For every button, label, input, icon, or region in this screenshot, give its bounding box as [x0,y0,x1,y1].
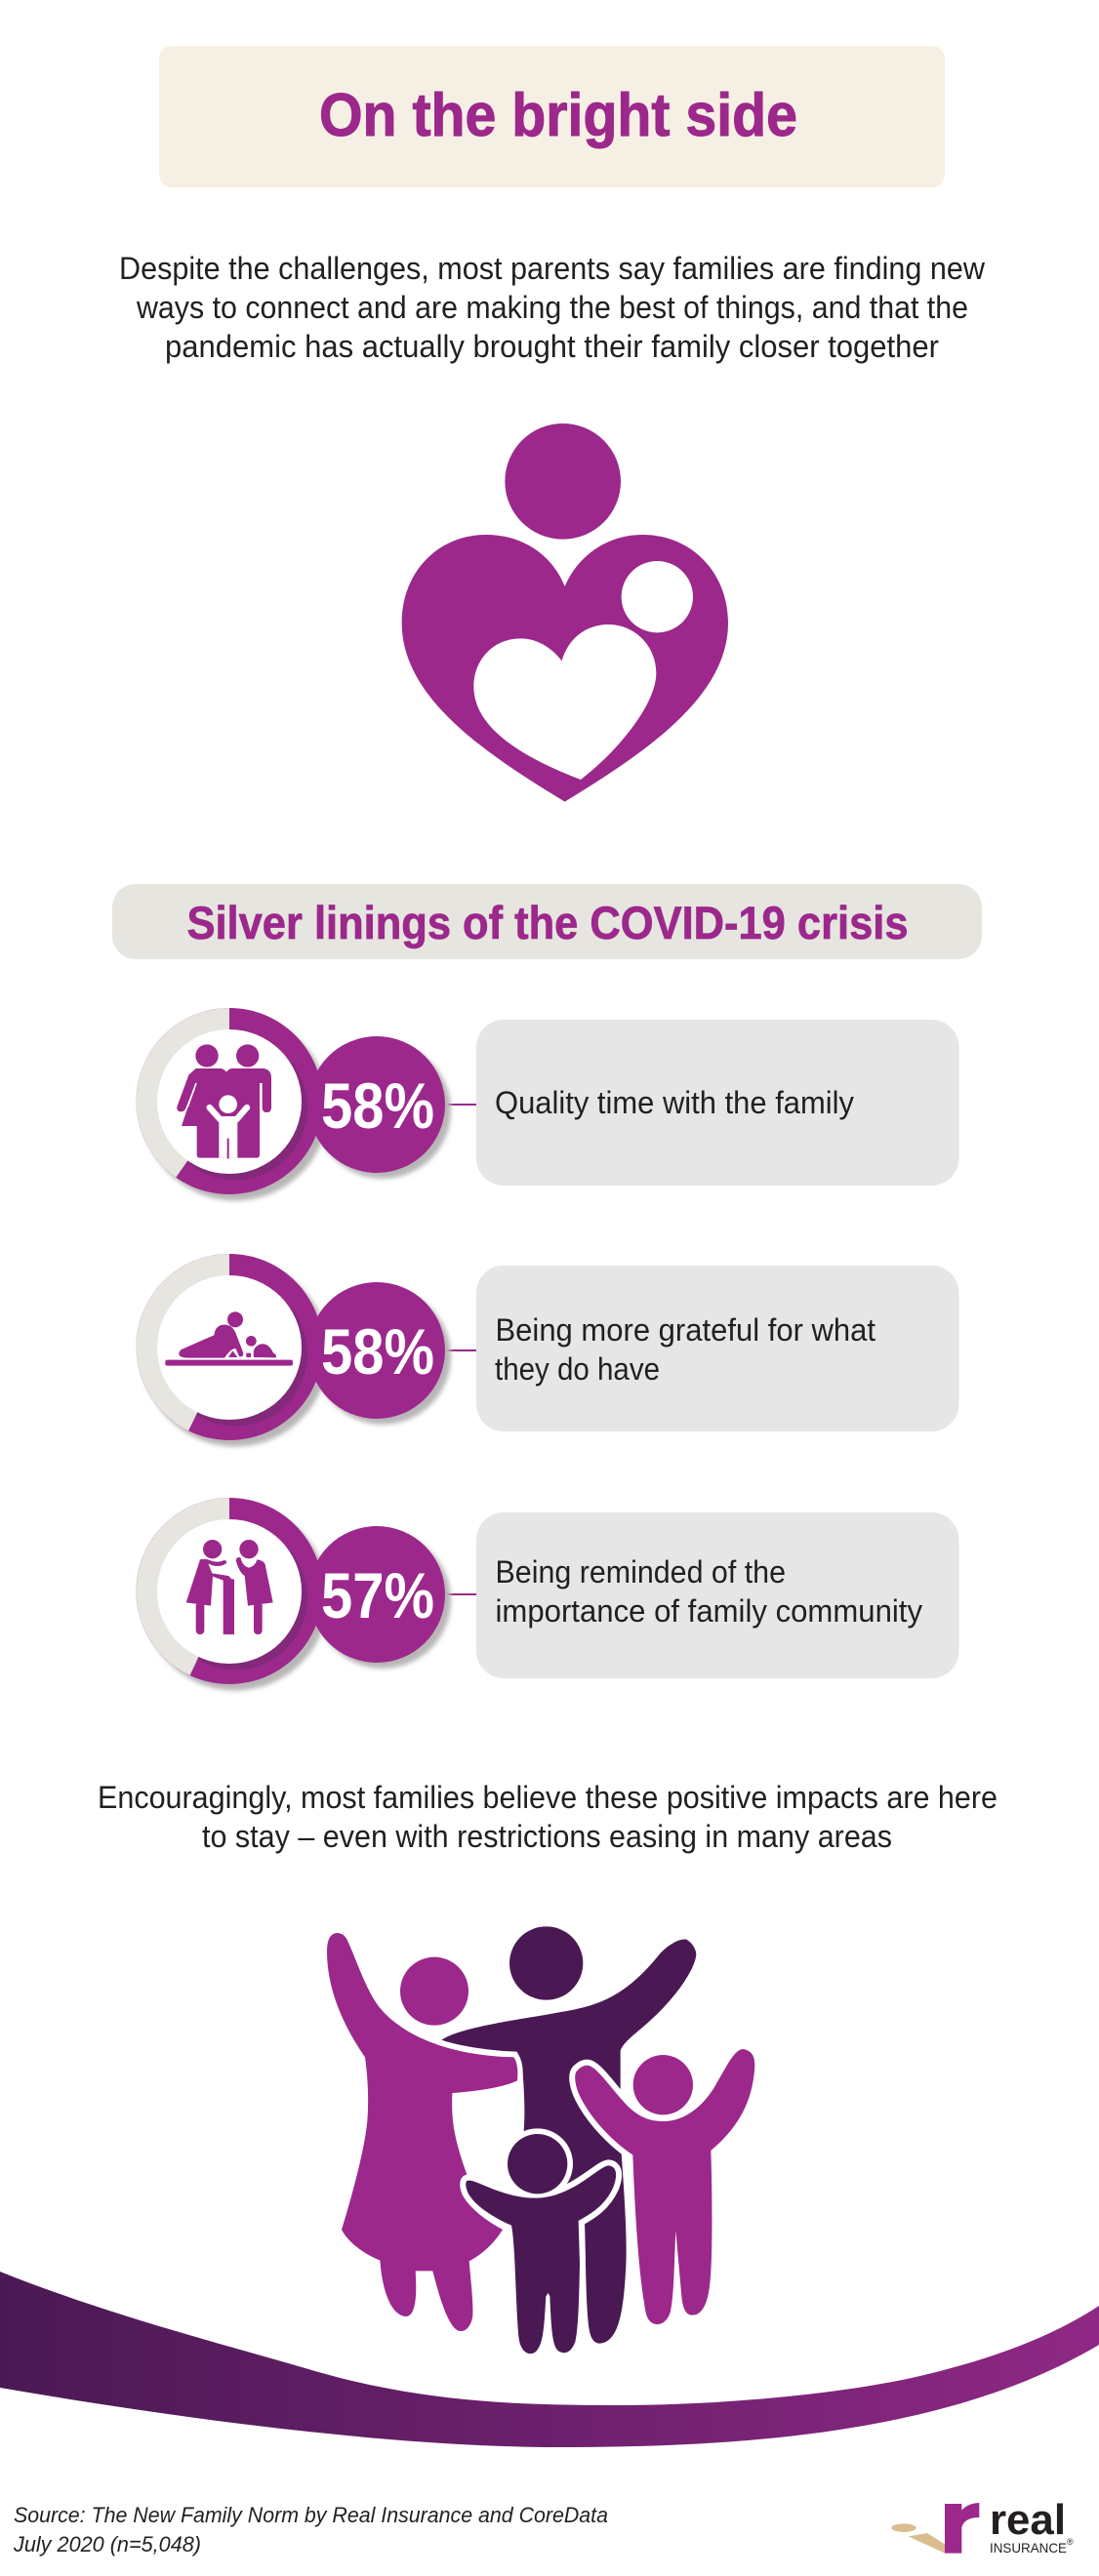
row 3: family community [137,1498,958,1690]
closing paragraph [98,1780,997,1854]
label card: they do have [495,1351,660,1387]
title banner [159,46,945,187]
percentage badge: 58% [321,1069,434,1142]
label card [476,1020,958,1186]
donut chart 58% [137,1008,328,1200]
icon: parent crawling with baby [165,1311,293,1366]
section heading: silver linings: Silver linings of the COVID-19 crisis [187,897,908,948]
icon: parent embracing child heart [402,423,728,802]
percentage badge [308,1282,451,1425]
intro paragraph: ways to connect and are making the best of things, and that the [136,290,968,325]
closing paragraph: Encouragingly, most families believe these positive impacts are here [98,1780,997,1815]
illustration: family of four cheering [327,1926,754,2354]
intro paragraph [119,251,986,364]
logo: Real Insurance: ® [1067,2537,1074,2547]
icon: two adults with child [186,1540,273,1634]
mother [327,1933,517,2331]
source note: Source: The New Family Norm by Real Insurance and CoreData [14,2503,608,2527]
row 1: quality time [137,1008,958,1200]
intro paragraph: pandemic has actually brought their family closer together [165,329,939,364]
older child [575,2049,754,2324]
label card: Quality time with the family [495,1085,854,1120]
swoosh band [0,2272,1099,2447]
logo: Real Insurance: real [990,2496,1066,2544]
connector line [439,1593,478,1595]
row 2: grateful [137,1254,958,1446]
label card [476,1512,958,1678]
donut chart 58% [137,1254,328,1446]
percentage badge [308,1036,451,1179]
younger child [466,2128,616,2354]
title banner: On the bright side [319,82,797,149]
label card: Being reminded of the [496,1554,786,1590]
intro paragraph: Despite the challenges, most parents say families are finding new [119,251,986,286]
donut chart 57% [137,1498,328,1690]
percentage badge: 57% [321,1559,434,1631]
source note: July 2020 (n=5,048) [13,2532,201,2556]
connector line [439,1104,478,1106]
closing paragraph: to stay – even with restrictions easing in many areas [202,1819,892,1854]
section heading: silver linings [112,884,982,959]
label card: Being more grateful for what [496,1312,875,1348]
percentage badge: 58% [321,1315,434,1388]
logo mark [891,2503,979,2554]
icon: family of three [177,1044,271,1158]
father [441,1926,696,2344]
label card: importance of family community [496,1593,922,1629]
source note [13,2503,608,2556]
logo: Real Insurance: INSURANCE [990,2540,1067,2556]
connector line [439,1349,478,1351]
percentage badge [308,1526,451,1669]
label card [476,1266,958,1431]
logo: Real Insurance [891,2496,1074,2556]
